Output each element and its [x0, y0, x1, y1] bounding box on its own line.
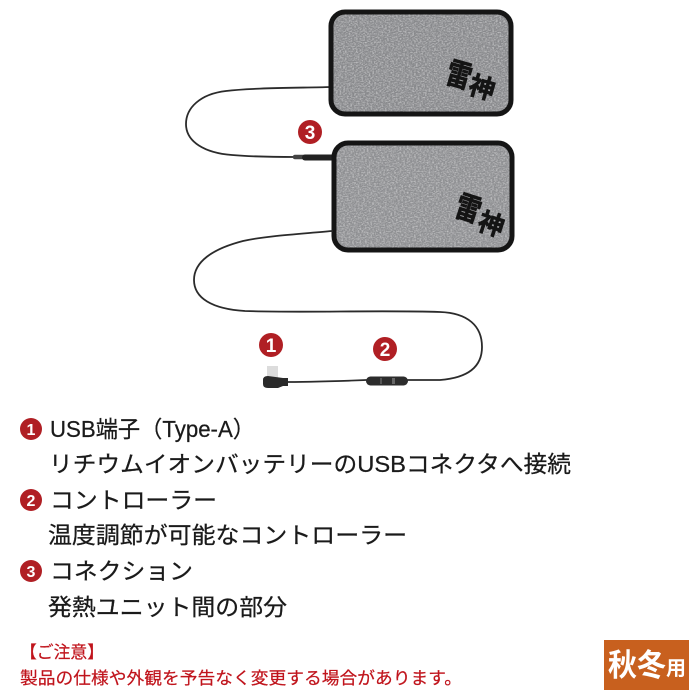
- cable: lower pad to controller and USB plug: [194, 231, 482, 382]
- callout: marker 3 on the photo: 3: [305, 123, 315, 144]
- panel: upper heating pad: [331, 12, 511, 114]
- text block: item 3 connection: 発熱ユニット間の部分: [48, 594, 287, 620]
- logo: lower pad: 神: [474, 206, 508, 243]
- panel: lower heating pad: [334, 143, 512, 250]
- text block: item 1 USB connector: リチウムイオンバッテリーのUSBコネクタへ接続: [49, 451, 571, 477]
- logo: upper pad: [442, 56, 499, 106]
- badge: autumn and winter use: 秋冬: [608, 648, 666, 683]
- text block: item 1 USB connector: [20, 416, 571, 477]
- logo: lower pad: 雷: [451, 189, 485, 229]
- text block: caution note: 製品の仕様や外観を予告なく変更する場合があります。: [20, 669, 462, 688]
- logo: upper pad: 雷: [442, 56, 476, 95]
- callout: marker 2 on the photo: 2: [380, 340, 390, 361]
- text block: item 1 USB connector: USB端子（Type-A）: [50, 416, 255, 442]
- icon: inline controller: [366, 376, 408, 386]
- text block: caution note: [20, 643, 462, 688]
- text block: item 2 controller: 温度調節が可能なコントローラー: [48, 522, 407, 548]
- text block: item 2 controller: 2: [27, 493, 36, 510]
- text block: item 2 controller: コントローラー: [50, 487, 217, 513]
- text block: item 2 controller: [20, 487, 407, 548]
- logo: lower pad: [451, 189, 508, 243]
- text block: item 3 connection: 3: [27, 564, 36, 581]
- callout: marker 1 on the photo: 1: [266, 336, 277, 357]
- logo: upper pad: 神: [465, 70, 499, 106]
- text block: item 3 connection: コネクション: [50, 558, 193, 584]
- text block: caution note: 【ご注意】: [20, 643, 104, 662]
- callout: marker 1 on the photo: [259, 333, 283, 357]
- cable: between the two pads: [186, 87, 333, 158]
- text block: item 1 USB connector: 1: [27, 422, 36, 439]
- text block: item 3 connection: [20, 558, 287, 620]
- badge: autumn and winter use: 用: [666, 658, 686, 680]
- callout: marker 3 on the photo: [298, 120, 322, 144]
- icon: USB Type-A plug: [263, 366, 288, 388]
- badge: autumn and winter use: [604, 640, 689, 690]
- callout: marker 2 on the photo: [373, 337, 397, 361]
